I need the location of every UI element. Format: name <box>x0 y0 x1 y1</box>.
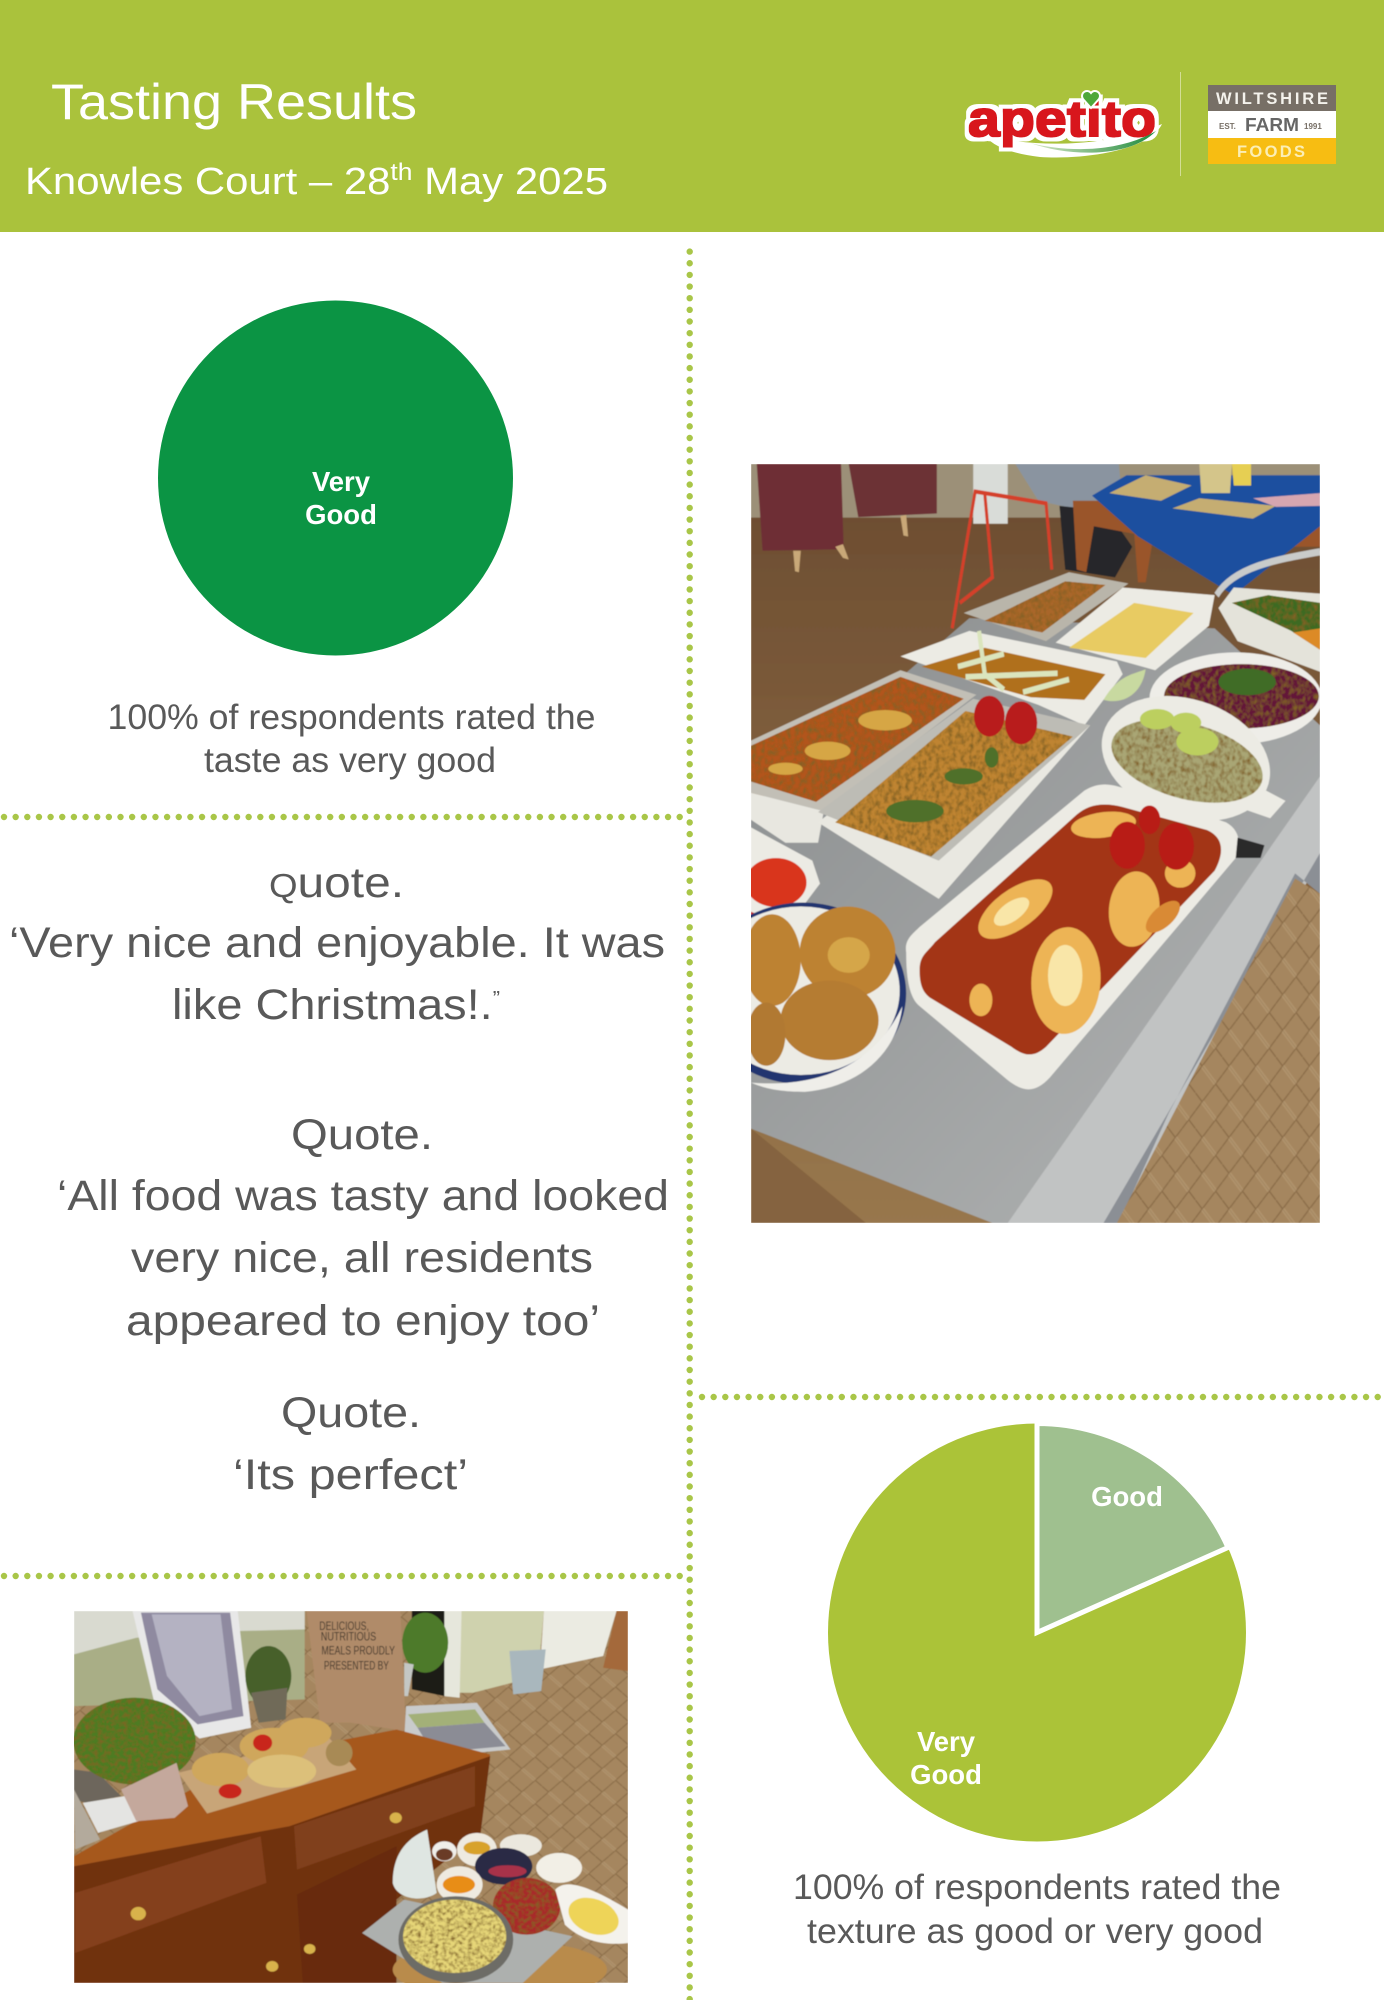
logo: apetito: apetito <box>968 91 1156 147</box>
quote 3: Quote. <box>281 1389 421 1437</box>
logo: Wiltshire Farm Foods <box>1208 85 1336 164</box>
photo: buffet table on a sideboard: MEALS PROUDLY <box>322 1644 395 1657</box>
photo: buffet table on a sideboard: PRESENTED BY <box>324 1659 389 1672</box>
subtitle: th <box>390 159 412 186</box>
pie chart: texture: Very <box>917 1726 976 1757</box>
caption: taste: taste as very good <box>204 741 496 780</box>
quote 2: very nice, all residents <box>131 1234 593 1282</box>
quote 1: like Christmas!. <box>172 981 466 1029</box>
quote 3 <box>233 1389 468 1499</box>
pie chart: texture: Good <box>910 1759 982 1790</box>
caption: taste <box>108 698 596 780</box>
pie chart: texture: Good <box>1091 1481 1163 1512</box>
logo: Wiltshire Farm Foods: 1991 <box>1304 122 1322 131</box>
quote 1 <box>9 859 665 1029</box>
header band <box>0 0 1384 232</box>
quote 1: Quote. <box>269 859 404 907</box>
quote 1: ” <box>493 988 500 1010</box>
quote 2 <box>57 1111 669 1345</box>
pie chart: taste: Good <box>305 499 377 530</box>
quote 2: Quote. <box>291 1111 433 1159</box>
quote 1: ‘Very nice and enjoyable. It was <box>9 919 665 967</box>
quote 3: ‘Its perfect’ <box>233 1451 468 1499</box>
logo: Wiltshire Farm Foods: FOODS <box>1237 143 1305 161</box>
caption: texture: 100% of respondents rated the <box>793 1868 1281 1907</box>
pie chart: taste <box>158 300 513 656</box>
subtitle: Knowles Court – 28 <box>25 161 357 203</box>
quote 2: ‘All food was tasty and looked <box>57 1172 669 1220</box>
caption: taste: 100% of respondents rated the <box>108 698 596 737</box>
photo: buffet table on a sideboard: NUTRITIOUS <box>321 1630 376 1643</box>
pie chart: taste: Very <box>312 466 371 497</box>
photo: buffet table on a sideboard <box>74 1611 628 1983</box>
caption: texture <box>793 1868 1281 1951</box>
subtitle: May 2025 <box>412 161 608 203</box>
logo divider <box>1180 72 1181 176</box>
logo: Wiltshire Farm Foods: EST. <box>1219 122 1236 131</box>
logo: Wiltshire Farm Foods: FARM <box>1245 115 1299 135</box>
photo: buffet table on a sideboard: DELICIOUS, <box>319 1620 369 1633</box>
photo: prepared dishes on a serving trolley <box>751 464 1320 1223</box>
caption: texture: texture as good or very good <box>807 1912 1263 1951</box>
logo: Wiltshire Farm Foods: WILTSHIRE <box>1216 90 1328 108</box>
quote 2: appeared to enjoy too’ <box>126 1297 600 1345</box>
title: Tasting Results <box>51 74 417 130</box>
pie chart: texture <box>828 1424 1246 1842</box>
